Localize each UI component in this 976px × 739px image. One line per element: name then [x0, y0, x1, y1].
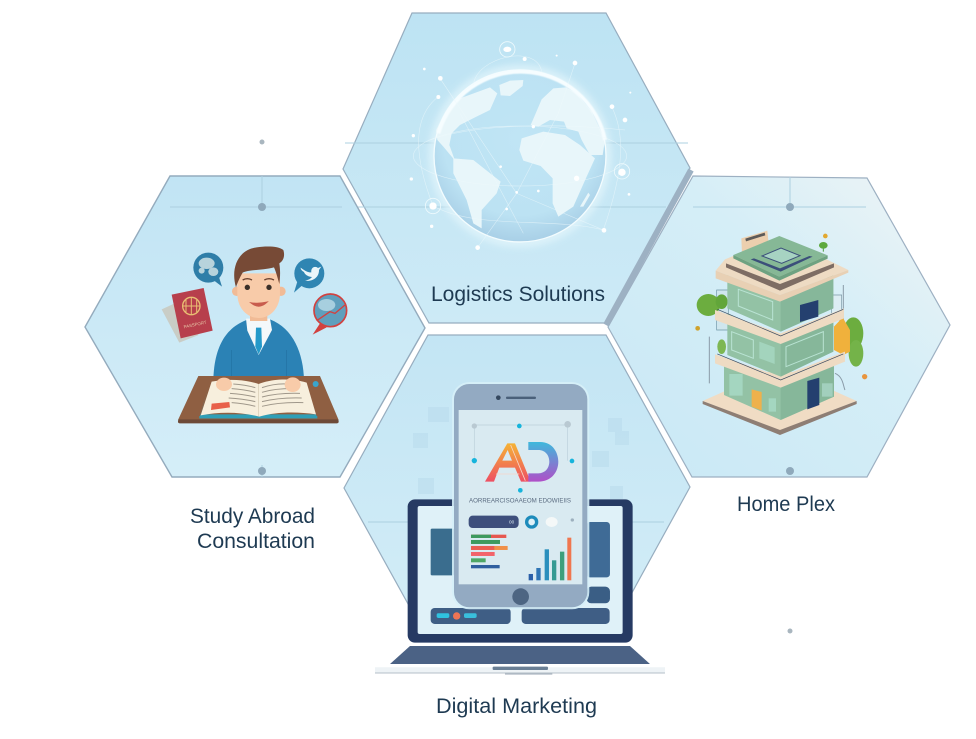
icon: twitter speech bubble: [294, 258, 324, 293]
label: study abroad consultation: Study Abroad: [190, 505, 315, 528]
trees and poles: [695, 234, 867, 390]
phone tagline: AORREARCISOAAEOM EDOWIEIIS: [469, 498, 571, 504]
label: study abroad consultation: Consultation: [197, 530, 315, 553]
floor slab 2: [715, 352, 845, 388]
bar chart: horizontal: [471, 535, 508, 568]
globe network lines: [413, 56, 627, 247]
hexagon shared edge band: [606, 170, 691, 325]
roof slab: [716, 237, 848, 295]
label: digital marketing: Digital Marketing: [436, 695, 597, 718]
panel: digital marketing hexagon: [344, 335, 690, 640]
desk: [178, 376, 339, 420]
globe continents: [436, 80, 605, 228]
decorative dots: [260, 140, 792, 634]
phone: 00: [509, 520, 515, 525]
label: logistics solutions: Logistics Solutions: [431, 283, 605, 306]
roof top: [733, 236, 828, 277]
laptop: [375, 499, 665, 675]
illustration: globe: [410, 42, 631, 250]
bar chart: vertical: [529, 538, 571, 580]
globe bright rim: [434, 70, 606, 242]
label: home plex: Home Plex: [737, 493, 835, 516]
panel: study abroad hexagon: [85, 176, 425, 477]
panel: home plex hexagon: [608, 176, 950, 477]
illustration: student at desk: [162, 247, 347, 423]
laptop base: [390, 646, 650, 664]
illustration: isometric building: [695, 231, 867, 435]
floor 2: [727, 313, 833, 377]
person: [213, 247, 304, 387]
icon: passport: PASSPORT: [183, 320, 207, 329]
phone: [452, 382, 589, 609]
base slab: [703, 367, 857, 431]
illustration: laptop and phone: [375, 382, 665, 675]
floor 3: [727, 275, 833, 332]
face: [237, 273, 280, 318]
icon: chart speech bubble: [313, 294, 347, 335]
torso: [213, 319, 304, 387]
chimney: [741, 231, 769, 253]
globe nodes: [410, 42, 631, 250]
icon: passport: [162, 288, 213, 343]
icon: globe speech bubble: [193, 253, 223, 287]
floor 1: [724, 360, 834, 420]
logo: AD: [485, 442, 558, 482]
floor slab 3: [715, 308, 844, 344]
open book: [199, 377, 317, 418]
panel: logistics solutions hexagon: [343, 13, 690, 323]
